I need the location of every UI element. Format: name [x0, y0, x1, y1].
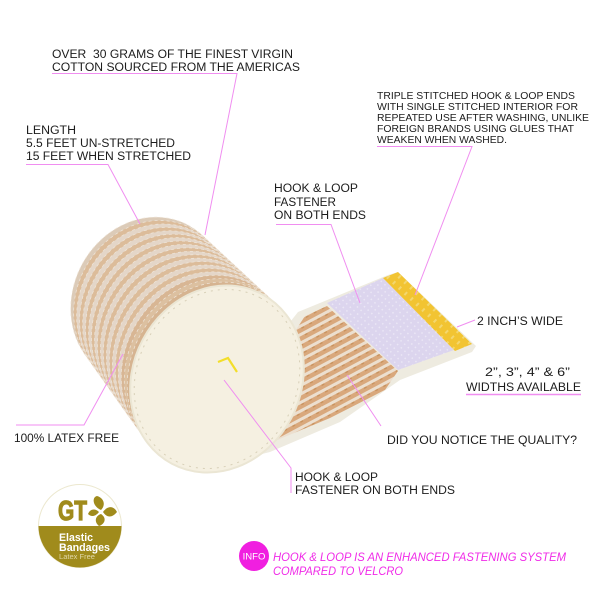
label: hook and loop bottom: FASTENER ON BOTH ENDS [295, 485, 455, 497]
label: hook and loop top: FASTENER [274, 197, 336, 209]
label: length [26, 125, 191, 163]
label: cotton: OVER 30 GRAMS OF THE FINEST VIRGIN [52, 49, 293, 61]
label: triple stitched: WEAKEN WHEN WASHED. [377, 135, 507, 146]
logo gold lower half [38, 526, 122, 567]
label: widths available: 2”, 3”, 4” & 6” [485, 367, 570, 379]
info note [273, 550, 566, 578]
label: widths available: WIDTHS AVAILABLE [466, 382, 581, 394]
info note: HOOK & LOOP IS AN ENHANCED FASTENING SYSTEM [273, 550, 566, 564]
strap tan weave [250, 306, 398, 443]
logo: GT Elastic Bandages [38, 484, 122, 568]
logo circle [38, 484, 122, 568]
label: cotton: COTTON SOURCED FROM THE AMERICAS [52, 62, 300, 74]
bandage roll [42, 190, 336, 503]
bandage strap [230, 272, 476, 462]
label: cotton [52, 49, 300, 74]
label: widths available [466, 367, 581, 394]
label: quality: DID YOU NOTICE THE QUALITY? [387, 435, 577, 447]
label: two inch wide: 2 INCH’S WIDE [477, 316, 563, 328]
hook and loop patch [327, 278, 454, 370]
logo product name: Elastic [59, 532, 93, 544]
info note: COMPARED TO VELCRO [273, 564, 403, 578]
strap white edge [230, 272, 476, 462]
label: triple stitched [377, 91, 589, 146]
label: length: 5.5 FEET UN-STRETCHED [26, 138, 175, 150]
label: length: LENGTH [26, 125, 76, 137]
yellow stitched end [383, 272, 472, 351]
label: hook and loop top: ON BOTH ENDS [274, 210, 366, 222]
label: triple stitched: REPEATED USE AFTER WASHING, UNLIKE [377, 113, 589, 124]
icon: butterfly leaves [88, 496, 117, 526]
label: triple stitched: FOREIGN BRANDS USING GLUES THAT [377, 124, 574, 135]
roll end face [98, 255, 336, 503]
label: latex free: 100% LATEX FREE [14, 433, 119, 445]
roll body stripes [42, 190, 332, 499]
logo GT letters: GT [58, 495, 87, 526]
label: hook and loop top [274, 183, 366, 222]
label: length: 15 FEET WHEN STRETCHED [26, 151, 191, 163]
logo latex free note: Latex Free [59, 554, 95, 561]
logo: GT Elastic Bandages: Bandages [59, 542, 110, 554]
label: hook and loop bottom [295, 472, 455, 497]
callout lines [16, 74, 581, 493]
label: hook and loop bottom: HOOK & LOOP [295, 472, 378, 484]
roll face stitched rim [103, 260, 331, 498]
label: triple stitched: WITH SINGLE STITCHED INTERIOR FOR [377, 102, 578, 113]
roll centre with yellow tag [218, 358, 237, 372]
info badge: INFO [243, 552, 265, 562]
label: hook and loop top: HOOK & LOOP [274, 183, 358, 195]
label: triple stitched: TRIPLE STITCHED HOOK & LOOP ENDS [377, 91, 575, 102]
info badge [239, 541, 269, 571]
